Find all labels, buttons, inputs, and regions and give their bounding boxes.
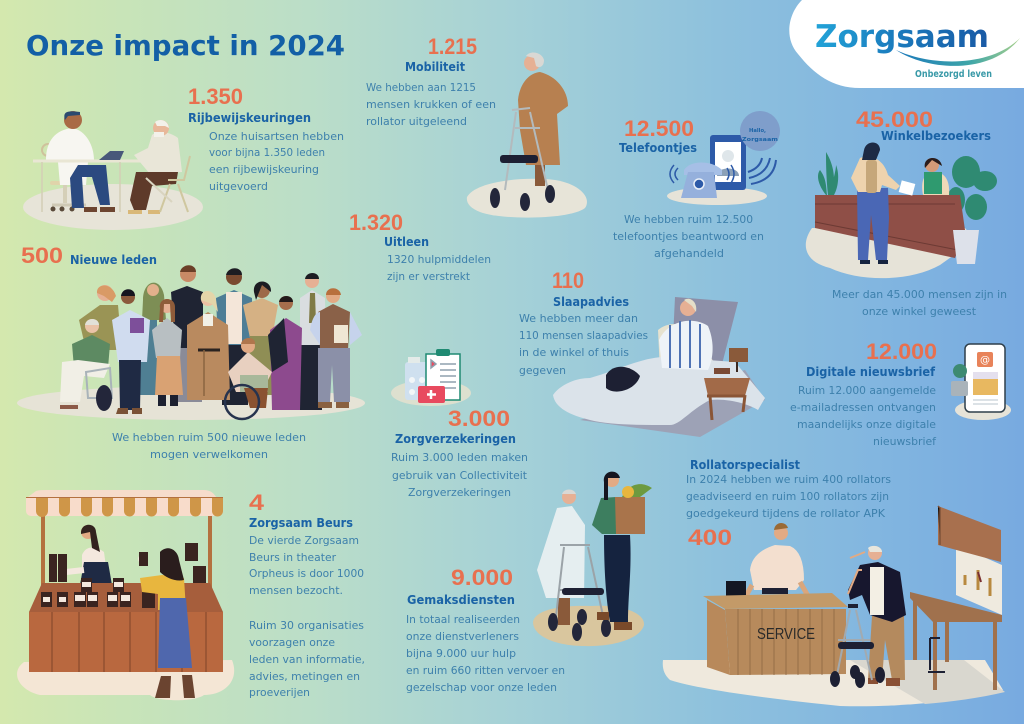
heading and text: We hebben ruim 12.500 <box>624 213 753 226</box>
heading and text: In 2024 hebben we ruim 400 rollators <box>686 473 891 486</box>
panel: mobiliteit <box>366 34 587 218</box>
heading and text: geadviseerd en ruim 100 rollators zijn <box>686 490 889 503</box>
logo panel: Zorgsaam <box>815 19 989 55</box>
heading and text: Mobiliteit <box>405 60 465 74</box>
illustration: service desk: SERVICE <box>757 626 815 643</box>
illustration: phone and tablet: Zorgsaam <box>742 137 778 143</box>
heading and text <box>249 490 365 699</box>
heading and text: gegeven <box>519 364 566 377</box>
heading and text: 12.000 <box>866 339 937 364</box>
heading and text: voor bijna 1.350 leden <box>209 146 325 159</box>
heading and text: mensen krukken of een <box>366 98 496 111</box>
panel: nieuwe leden <box>17 243 365 461</box>
title: Onze impact in 2024 <box>26 29 345 62</box>
panel: gemaksdiensten <box>406 472 652 694</box>
illustration: service desk <box>663 506 1005 706</box>
text block: uitleen: 1.320 <box>349 210 403 235</box>
text block: uitleen: zijn er verstrekt <box>387 270 471 283</box>
heading and text <box>391 406 528 499</box>
panel: zorgverzekeringen <box>391 349 528 499</box>
icon: clipboard and medicine <box>391 349 471 406</box>
illustration: shop counter <box>806 142 997 278</box>
illustration: helper with shopping and woman with rollator <box>533 472 652 646</box>
logo panel <box>789 0 1024 88</box>
heading and text: Rollatorspecialist <box>690 458 800 472</box>
heading and text: Zorgverzekeringen <box>408 486 511 499</box>
heading and text: Zorgverzekeringen <box>395 432 516 446</box>
heading and text: goedgekeurd tijdens de rollator APK <box>686 507 886 520</box>
caption: We hebben ruim 500 nieuwe leden <box>112 431 306 444</box>
heading and text: bijna 9.000 uur hulp <box>406 647 516 660</box>
text block: uitleen: Uitleen <box>384 235 429 249</box>
heading and text: 12.500 <box>624 116 694 141</box>
heading and text: 1.215 <box>428 34 477 59</box>
heading and text: 110 mensen slaapadvies <box>519 329 648 342</box>
panel: digitale nieuwsbrief <box>790 339 1011 448</box>
heading and text <box>832 107 1007 318</box>
panel: telefoontjes <box>613 111 780 260</box>
heading and text: Orpheus is door 1000 <box>249 567 364 580</box>
heading and text <box>613 116 764 260</box>
heading and text <box>188 84 344 193</box>
heading and text: 45.000 <box>856 107 933 132</box>
heading and text: Digitale nieuwsbrief <box>806 365 936 379</box>
icon: phone with newsletter <box>951 344 1011 420</box>
heading and text: 3.000 <box>448 406 510 431</box>
heading and text <box>519 268 648 377</box>
heading and text: en ruim 660 ritten vervoer en <box>406 664 565 677</box>
illustration: group of people <box>17 265 365 420</box>
heading and text: uitgevoerd <box>209 180 268 193</box>
logo panel: Onbezorgd leven <box>915 69 992 80</box>
heading and text: Beurs in theater <box>249 551 336 564</box>
heading and text: Gemaksdiensten <box>407 593 515 607</box>
heading and text: afgehandeld <box>654 247 724 260</box>
heading and text <box>686 458 891 550</box>
heading and text: Onze huisartsen hebben <box>209 130 344 143</box>
heading and text: 9.000 <box>451 565 513 590</box>
text block: uitleen: 1320 hulpmiddelen <box>387 253 491 266</box>
heading and text: Winkelbezoekers <box>881 129 991 143</box>
heading and text: In totaal realiseerden <box>406 613 520 626</box>
heading and text: maandelijks onze digitale <box>797 418 936 431</box>
heading <box>21 243 157 268</box>
heading and text: Ruim 3.000 leden maken <box>391 451 528 464</box>
heading and text: Slaapadvies <box>553 295 629 309</box>
heading and text: We hebben meer dan <box>519 312 638 325</box>
heading and text: rollator uitgeleend <box>366 115 467 128</box>
heading: Nieuwe leden <box>70 253 157 267</box>
heading and text: mensen bezocht. <box>249 584 343 597</box>
panel: slaapadvies <box>519 268 765 437</box>
heading and text: een rijbewijskeuring <box>209 163 319 176</box>
heading and text: Rijbewijskeuringen <box>188 111 311 125</box>
heading and text: gebruik van Collectiviteit <box>392 469 528 482</box>
panel: winkelbezoekers <box>806 107 1007 318</box>
heading and text: advies, metingen en <box>249 670 360 683</box>
panel: rijbewijskeuringen <box>23 84 344 230</box>
heading and text: Telefoontjes <box>619 141 697 155</box>
heading and text: De vierde Zorgsaam <box>249 534 359 547</box>
heading and text: e-mailadressen ontvangen <box>790 401 936 414</box>
icon: phone with newsletter: @ <box>980 355 990 366</box>
heading and text: onze winkel geweest <box>862 305 977 318</box>
heading and text: leden van informatie, <box>249 653 365 666</box>
illustration: doctor and patient <box>23 111 203 230</box>
caption: mogen verwelkomen <box>150 448 268 461</box>
text block: uitleen <box>349 210 491 283</box>
caption <box>112 431 306 461</box>
heading and text: in de winkel of thuis <box>519 346 629 359</box>
heading and text: onze dienstverleners <box>406 630 519 643</box>
heading and text: Ruim 30 organisaties <box>249 619 364 632</box>
heading and text: 400 <box>688 525 732 550</box>
heading and text: 1.350 <box>188 84 243 109</box>
illustration: man in bed with cat <box>553 297 765 437</box>
heading: 500 <box>21 243 63 268</box>
illustration: market stall <box>17 490 234 700</box>
heading and text: 4 <box>249 490 265 515</box>
heading and text: telefoontjes beantwoord en <box>613 230 764 243</box>
illustration: woman with rollator <box>467 53 587 218</box>
heading and text: Meer dan 45.000 mensen zijn in <box>832 288 1007 301</box>
heading and text: Ruim 12.000 aangemelde <box>798 384 936 397</box>
illustration: phone and tablet <box>667 111 780 205</box>
heading and text: nieuwsbrief <box>873 435 937 448</box>
heading and text <box>790 339 937 448</box>
heading and text: proeverijen <box>249 686 310 699</box>
heading and text: We hebben aan 1215 <box>366 81 476 94</box>
heading and text: voorzagen onze <box>249 636 335 649</box>
illustration: phone and tablet: Hallo, <box>749 128 766 134</box>
heading and text: Zorgsaam Beurs <box>249 516 353 530</box>
panel: rollatorspecialist <box>663 458 1005 706</box>
panel: zorgsaam beurs <box>17 490 365 700</box>
heading and text: gezelschap voor onze leden <box>406 681 557 694</box>
heading and text <box>406 565 565 694</box>
heading and text: 110 <box>552 268 584 293</box>
heading and text <box>366 34 496 128</box>
